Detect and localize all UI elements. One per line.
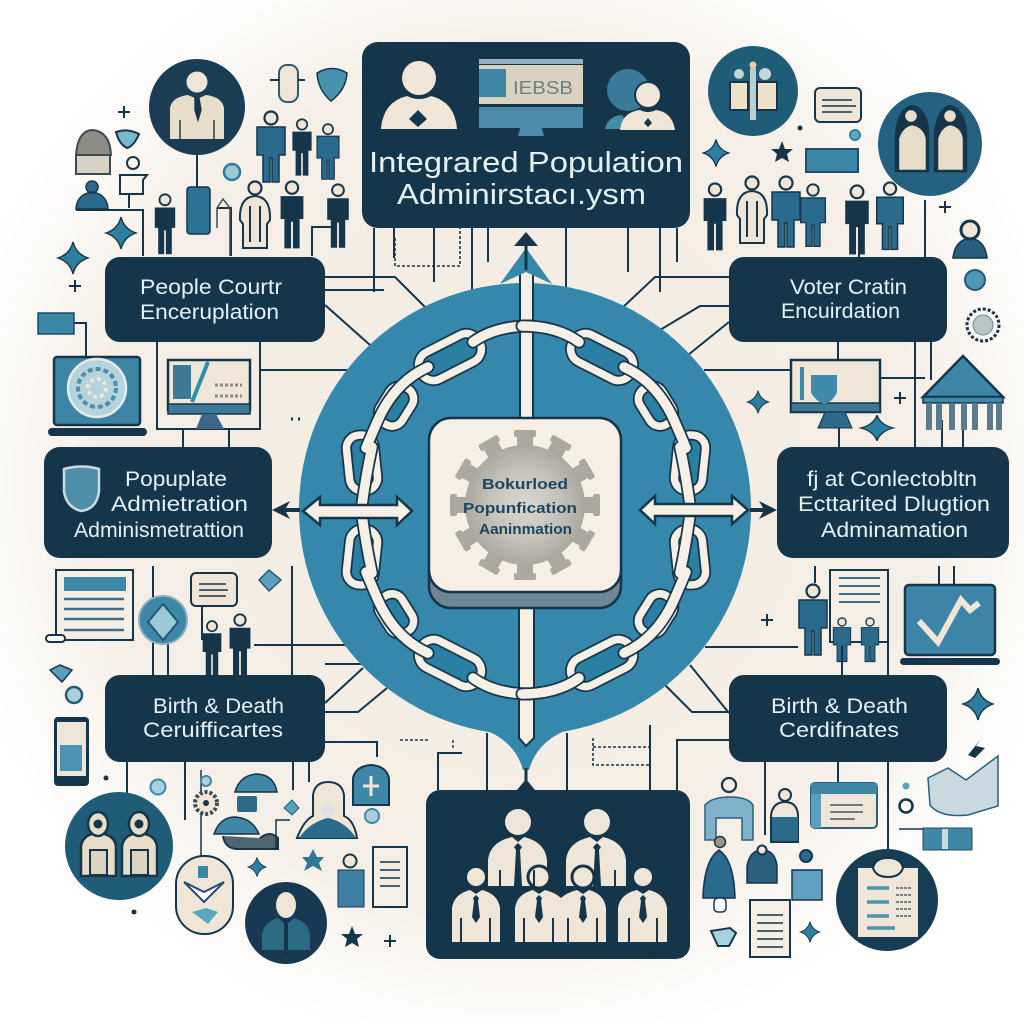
center text: Aaninmation <box>479 521 572 538</box>
panel: top title <box>362 42 690 228</box>
icon: circle two people right <box>878 92 982 196</box>
icon: tag with arrows <box>270 65 305 102</box>
panel: birth and death left: Birth & Death <box>153 695 284 718</box>
title text: Integrared Population <box>369 147 683 179</box>
icon: dots <box>291 418 300 420</box>
title text: Adminirstacı.ysm <box>397 179 646 211</box>
icon: monitor <box>479 59 583 136</box>
icons: top right small marks <box>703 126 951 213</box>
icon: person with shadow <box>605 69 675 130</box>
icon: card right top <box>806 149 858 172</box>
icon: laptop fingerprint <box>48 357 147 436</box>
icon: person with box <box>120 157 147 208</box>
icon: pen <box>217 199 230 256</box>
icon: circle two people top <box>708 46 798 136</box>
central card with gear <box>429 418 621 608</box>
panel: birth and death right: Cerdifnates <box>779 719 899 742</box>
panel: birth and death right <box>729 675 947 762</box>
left double arrow <box>272 497 412 525</box>
panel text: Admietration <box>111 493 248 516</box>
icon: circle clipboard <box>836 849 938 951</box>
icon: report lower left <box>46 570 133 642</box>
icons: right sparkles <box>748 391 906 441</box>
panel: birth and death left <box>105 675 325 762</box>
gear <box>450 430 600 580</box>
panel: people count: Enceruplation <box>140 301 279 324</box>
icon: people group top right <box>704 176 903 255</box>
icon: dome house <box>76 130 111 174</box>
icon: small orb <box>224 164 240 180</box>
icon: person left <box>381 61 457 129</box>
icon: circle person top left <box>149 59 245 155</box>
icon: small shield <box>116 130 139 148</box>
icon: woman bust <box>953 221 987 258</box>
icon: large orb <box>965 270 985 290</box>
icon: umbrella shapes <box>214 774 278 849</box>
icons: left sparkles <box>58 106 136 292</box>
panel: voter: Encuirdation <box>781 300 900 323</box>
icon: clipboard lower <box>373 847 407 907</box>
panel: people count <box>105 257 325 342</box>
icon: monitor: IEBSB <box>513 78 573 98</box>
panel: voter: Voter Cratin <box>790 276 907 299</box>
icon: map <box>928 756 998 816</box>
panel: connection administration: fj at Conlectobltn <box>807 468 977 491</box>
vertical axis arrow <box>500 232 552 790</box>
icon: person and document lower right <box>799 570 888 662</box>
center text: Poрunfication <box>463 500 577 517</box>
icons: right lower marks <box>711 614 993 946</box>
icon: temple <box>923 356 1003 430</box>
icon: document lower right <box>750 900 790 957</box>
icon: person blue <box>338 854 364 907</box>
icon: shield top <box>317 68 347 101</box>
panel: connection administration: Ecttarited Dlugtion <box>798 493 990 516</box>
icon: data card lower right <box>899 828 972 850</box>
icon: fingerprint right <box>967 309 999 341</box>
icons: bottom small marks <box>150 776 396 947</box>
icon: circle person bottom <box>245 882 327 964</box>
icon: document top right <box>815 88 861 122</box>
connector lines <box>74 155 963 880</box>
icon: capsule badge <box>176 856 233 934</box>
icons: left small marks <box>50 570 281 914</box>
icon: hooded person <box>297 782 357 838</box>
center text: Bokurloed <box>482 476 568 493</box>
central circle <box>299 283 751 770</box>
icon: note lower left <box>191 573 237 606</box>
icon: monitor chart left <box>168 360 250 429</box>
icon: monitor shield right <box>791 360 880 428</box>
icon: circle two people lower left <box>65 792 173 900</box>
icon: browser window <box>811 783 877 828</box>
panel: birth and death left: Ceruifficartes <box>143 719 283 742</box>
icon: people lower right <box>703 778 822 912</box>
icon: medical bag <box>353 765 389 823</box>
icon: laptop checkmark <box>900 585 1000 665</box>
panel: birth and death right: Birth & Death <box>771 695 908 718</box>
icon: phone <box>54 717 89 786</box>
panel text: Popuplate <box>125 468 227 491</box>
panel: connection administration: Adminamation <box>821 519 968 542</box>
icon: globe shield <box>139 596 187 644</box>
panel: people count: People Courtr <box>140 276 282 299</box>
icon: small card left <box>38 313 74 334</box>
icon: people group top left <box>155 112 349 254</box>
panel: voter <box>729 257 947 342</box>
chain ring <box>345 326 707 694</box>
panel text: Adminismetrattion <box>74 519 244 542</box>
panel: populate administration <box>44 447 272 558</box>
icon: shield <box>64 466 99 511</box>
icon: small person bust <box>76 181 108 209</box>
panel: bottom group of people <box>426 790 690 959</box>
right double arrow <box>640 496 777 524</box>
panel: connection administration <box>777 447 1009 558</box>
icon: two people lower left <box>203 614 250 676</box>
icon: device tower <box>187 187 210 234</box>
